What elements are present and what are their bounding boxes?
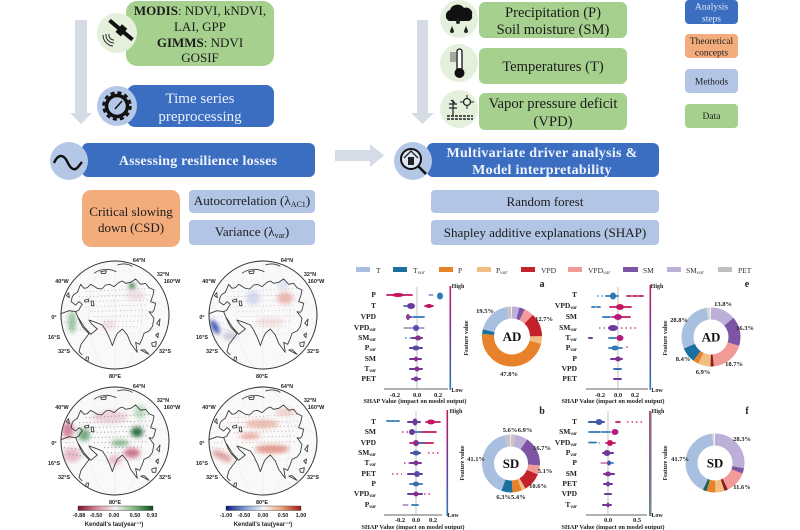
arrow: left to right — [335, 144, 384, 167]
data box: precipitation and soil moisture — [479, 2, 627, 38]
donut labels e: 8.4% — [676, 356, 690, 363]
donut labels b: b — [539, 406, 545, 417]
legend: SHAP feature colours: PET — [738, 266, 752, 275]
legend item: analysis steps — [685, 0, 738, 24]
legend: box categories — [685, 0, 738, 128]
icon: dry plant and sun — [440, 90, 478, 128]
step box: multivariate driver analysis — [427, 143, 659, 178]
icon: thermometer — [440, 44, 478, 82]
donut labels a: 19.5% — [476, 308, 494, 315]
feature labels b: SM — [358, 448, 369, 457]
ticks f: 0.5 — [633, 517, 642, 524]
donut labels b: 16.7% — [533, 445, 551, 452]
feature labels e: PET — [562, 374, 577, 383]
feature labels f: var — [570, 453, 577, 458]
data box: temperatures — [479, 48, 627, 84]
feature labels b: P — [371, 479, 376, 488]
feature labels a — [354, 290, 377, 383]
map graticule labels: 0° — [51, 441, 57, 447]
map graticule labels — [48, 384, 181, 506]
map graticule labels: 40°W — [55, 405, 70, 411]
ticks b — [361, 517, 465, 530]
map: bottom right globe — [196, 384, 325, 506]
feature labels a: P — [365, 343, 369, 352]
colorbar: blue-red Kendall tau — [220, 506, 306, 528]
arrow: down to driver analysis — [411, 20, 434, 124]
step box: time series preprocessing — [127, 85, 274, 127]
map graticule labels: 40°W — [55, 279, 70, 285]
ticks a — [363, 392, 467, 405]
feature labels a: VPD — [354, 323, 369, 332]
map: top left globe — [48, 258, 181, 380]
legend: SHAP feature colours: VPD — [588, 266, 603, 275]
feature labels b: T — [364, 458, 369, 467]
method box: autocorrelation: AC1 — [291, 200, 306, 209]
map graticule labels: 0° — [199, 315, 205, 321]
ticks b: 0.0 — [412, 517, 420, 524]
chart: SHAP beeswarm f — [555, 409, 669, 530]
ticks b: -0.2 — [395, 517, 405, 524]
data box: temperatures: Temperatures (T) — [502, 59, 604, 75]
map graticule labels: 160°W — [308, 405, 325, 411]
feature labels f: SM — [559, 427, 570, 436]
donut labels f: 28.3% — [733, 436, 751, 443]
feature labels a: P — [371, 290, 376, 299]
map graticule labels: 32°N — [157, 398, 169, 404]
feature value bar a: Low — [451, 388, 463, 394]
feature value bar e: High — [651, 284, 664, 290]
step box: assessing resilience losses — [82, 143, 315, 177]
method box: random forest — [431, 190, 659, 213]
feature labels f: PET — [562, 479, 577, 488]
chart: SHAP beeswarm b — [354, 409, 466, 530]
method box: variance: Variance (λ — [215, 224, 275, 239]
feature labels b: VPD — [361, 438, 377, 447]
legend: SHAP feature colours: P — [458, 266, 462, 275]
feature labels e: var — [570, 338, 577, 343]
data box: MODIS GIMMS GOSIF: GIMMS: NDVI — [157, 35, 243, 50]
method box: SHAP: Shapley additive explanations (SHAP) — [444, 225, 646, 240]
feature labels a: PET — [361, 374, 376, 383]
method box: SHAP — [431, 220, 659, 245]
feature labels f: var — [570, 505, 577, 510]
swarm points a — [387, 292, 443, 382]
feature labels e: T — [565, 333, 570, 342]
ticks a: 0.2 — [434, 392, 442, 399]
feature labels b: VPD — [354, 489, 369, 498]
swarm points f — [589, 419, 644, 508]
method box: autocorrelation: Autocorrelation (λ — [194, 193, 291, 208]
method box: variance — [189, 220, 315, 245]
feature value bar f — [649, 409, 669, 519]
feature labels e: VPD — [562, 364, 578, 373]
ticks b: 0.2 — [429, 517, 437, 524]
legend item: analysis steps: steps — [702, 14, 721, 24]
swarm points e — [589, 292, 643, 379]
concept box: critical slowing down: down (CSD) — [98, 220, 164, 235]
method box: autocorrelation: ) — [306, 193, 310, 208]
legend: SHAP feature colours — [356, 266, 752, 276]
data box: precipitation and soil moisture: Soil moisture (SM) — [497, 22, 609, 38]
feature value bar b — [446, 409, 466, 519]
feature value bar e: Feature value — [663, 320, 669, 356]
feature labels e: var — [570, 306, 577, 311]
ticks e: SHAP Value (impact on model output) — [561, 398, 665, 405]
colorbar: green-red Kendall tau: -0.88 — [73, 513, 85, 519]
chart: SHAP beeswarm e — [555, 284, 669, 405]
map graticule labels — [48, 258, 181, 380]
donut labels f — [671, 406, 751, 491]
feature labels e: SM — [566, 312, 577, 321]
ticks f: 0.0 — [604, 517, 612, 524]
donut labels f: 41.7% — [671, 456, 689, 463]
feature labels a: var — [369, 338, 376, 343]
map graticule labels: 16°S — [48, 335, 60, 341]
map graticule labels — [196, 258, 325, 380]
data box: vapor pressure deficit: Vapor pressure deficit — [489, 96, 617, 112]
data box: MODIS GIMMS GOSIF — [126, 1, 274, 66]
map graticule labels: 32°N — [304, 398, 316, 404]
feature value bar a: Feature value — [464, 320, 470, 356]
donut labels b: 5.1% — [538, 468, 552, 475]
feature labels a: var — [369, 328, 376, 333]
map graticule labels: 64°N — [281, 384, 293, 390]
colorbar: blue-red Kendall tau: Kendall's tau(year⁻¹) — [234, 521, 292, 528]
donut labels e — [670, 279, 754, 376]
ticks e: -0.2 — [595, 392, 605, 399]
feature labels b: SM — [365, 427, 376, 436]
colorbar: blue-red Kendall tau: 0.50 — [278, 513, 288, 519]
map graticule labels: 160°W — [164, 405, 181, 411]
map graticule labels: 64°N — [133, 258, 145, 264]
map: bottom left globe — [48, 384, 181, 506]
donut: f SD — [692, 440, 738, 486]
colorbar: blue-red Kendall tau: -1.00 — [220, 513, 232, 519]
ticks e: 0.2 — [631, 392, 639, 399]
colorbar: blue-red Kendall tau: -0.50 — [238, 513, 250, 519]
feature labels b: var — [369, 463, 376, 468]
concept box: critical slowing down — [82, 190, 180, 247]
feature value bar e — [650, 284, 669, 394]
donut labels e: 16.3% — [736, 325, 754, 332]
ticks f — [561, 517, 665, 530]
ticks e: 0.0 — [614, 392, 622, 399]
icon: wave — [50, 142, 88, 180]
colorbar: green-red Kendall tau: 0.93 — [147, 513, 157, 519]
donut labels a: AD — [503, 329, 521, 344]
donut labels e: 6.9% — [696, 369, 710, 376]
map graticule labels: 32°S — [58, 475, 70, 481]
panel: workflow left column — [50, 1, 315, 247]
method box: autocorrelation — [189, 190, 315, 213]
data box: MODIS GIMMS GOSIF: MODIS: NDVI, kNDVI, — [134, 3, 266, 18]
colorbar: green-red Kendall tau: -0.50 — [90, 513, 102, 519]
feature labels f: T — [572, 417, 577, 426]
ticks a: -0.2 — [390, 392, 400, 399]
map graticule labels: 16°S — [48, 461, 60, 467]
donut: a AD — [488, 312, 536, 360]
legend: SHAP feature colours: VPD — [541, 266, 557, 275]
feature labels f: VPD — [562, 489, 578, 498]
feature labels f: SM — [566, 469, 577, 478]
feature labels e: T — [572, 290, 577, 299]
legend: SHAP feature colours: SM — [643, 266, 654, 275]
donut: e AD — [688, 314, 734, 360]
feature labels e: P — [566, 343, 570, 352]
donut labels e: AD — [702, 330, 720, 344]
map graticule labels: 64°N — [281, 258, 293, 264]
map graticule labels: 32°S — [206, 475, 218, 481]
feature labels a: SM — [358, 333, 369, 342]
colorbar: green-red Kendall tau: 0.50 — [130, 513, 140, 519]
map graticule labels: 40°W — [202, 405, 217, 411]
feature labels b: P — [365, 500, 369, 509]
legend item: data: Data — [703, 112, 721, 122]
feature labels e — [555, 290, 578, 383]
feature labels e: SM — [559, 323, 570, 332]
icon: magnifier on house — [394, 142, 432, 180]
ticks e — [561, 392, 665, 405]
concept box: critical slowing down: Critical slowing — [89, 204, 173, 219]
donut labels f: 11.6% — [733, 484, 751, 491]
feature labels b — [354, 417, 377, 510]
map graticule labels: 32°S — [159, 349, 171, 355]
feature labels e: var — [570, 348, 577, 353]
feature labels a: T — [364, 364, 369, 373]
feature labels f: var — [570, 443, 577, 448]
donut labels b: 6.3%5.4% — [496, 494, 526, 501]
feature labels b: PET — [361, 469, 376, 478]
donut labels b: 5.6% — [503, 427, 517, 434]
map graticule labels: 32°N — [304, 272, 316, 278]
arrow: down to resilience — [70, 20, 92, 124]
legend: SHAP feature colours: T — [413, 266, 418, 275]
chart: SHAP beeswarm a — [354, 284, 470, 405]
legend: SHAP feature colours: var — [603, 270, 611, 276]
donut: b SD — [488, 440, 534, 486]
feature labels a: var — [369, 369, 376, 374]
donut labels e: e — [745, 279, 750, 290]
feature labels a: T — [371, 301, 376, 310]
feature value bar a — [450, 284, 470, 394]
icon: gear gauge — [97, 86, 137, 126]
feature labels a: SM — [365, 354, 376, 363]
feature labels f: var — [570, 432, 577, 437]
feature labels e: var — [570, 328, 577, 333]
colorbar: blue-red Kendall tau: 0.00 — [258, 513, 268, 519]
data box: precipitation and soil moisture: Precipitation (P) — [505, 5, 601, 21]
map graticule labels: 160°W — [164, 279, 181, 285]
feature labels b: var — [369, 453, 376, 458]
step box: time series preprocessing: Time series — [165, 91, 235, 107]
feature labels b: var — [369, 505, 376, 510]
legend item: theoretical concepts: concepts — [695, 48, 728, 58]
feature labels f: P — [572, 458, 577, 467]
donut labels b: 6.9% — [518, 427, 532, 434]
map graticule labels: 16°S — [196, 335, 208, 341]
feature labels e: P — [572, 354, 577, 363]
legend: SHAP feature colours: P — [496, 266, 500, 275]
data box: MODIS GIMMS GOSIF: LAI, GPP — [174, 19, 226, 34]
map graticule labels — [196, 384, 325, 506]
colorbar: green-red Kendall tau: 0.00 — [109, 513, 119, 519]
donut labels a: 12.7% — [535, 316, 553, 323]
map graticule labels: 32°S — [58, 349, 70, 355]
feature labels f: T — [565, 500, 570, 509]
map graticule labels: 0° — [199, 441, 205, 447]
colorbar: green-red Kendall tau: Kendall's tau(year⁻¹) — [85, 521, 143, 528]
legend: SHAP feature colours: var — [418, 270, 426, 276]
legend: SHAP feature colours: var — [697, 270, 705, 276]
icon: rain cloud — [440, 0, 478, 38]
legend: SHAP feature colours: T — [376, 266, 381, 275]
feature value bar a: High — [452, 284, 465, 290]
donut labels e: 13.8% — [714, 301, 732, 308]
ticks a: SHAP Value (impact on model output) — [363, 398, 467, 405]
donut labels a: 47.8% — [500, 371, 518, 378]
map graticule labels: 32°S — [159, 475, 171, 481]
method box: variance: var — [275, 231, 285, 240]
map graticule labels: 32°N — [157, 272, 169, 278]
feature value bar f: High — [652, 409, 665, 415]
feature labels b: var — [369, 494, 376, 499]
method box: random forest: Random forest — [507, 194, 584, 209]
feature labels a: VPD — [361, 312, 377, 321]
map graticule labels: 80°E — [109, 500, 121, 506]
feature labels f — [555, 417, 578, 510]
map graticule labels: 80°E — [256, 500, 268, 506]
map graticule labels: 80°E — [256, 374, 268, 380]
data box: vapor pressure deficit — [479, 93, 627, 130]
map graticule labels: 40°W — [202, 279, 217, 285]
map graticule labels: 32°S — [307, 349, 319, 355]
feature value bar b: High — [450, 409, 463, 415]
data box: MODIS GIMMS GOSIF: GOSIF — [181, 50, 219, 65]
step box: multivariate driver analysis: Model interpretability — [472, 163, 612, 178]
feature value bar e: Low — [651, 388, 663, 394]
donut labels b — [467, 406, 552, 501]
feature value bar f: Feature value — [663, 445, 669, 481]
legend: SHAP feature colours: SM — [686, 266, 697, 275]
donut labels b: SD — [503, 456, 519, 471]
swarm points b — [387, 418, 440, 505]
step box: multivariate driver analysis: Multivariate driver analysis & — [446, 146, 638, 161]
map graticule labels: 0° — [51, 315, 57, 321]
method box: variance: ) — [285, 224, 289, 239]
map graticule labels: 64°N — [133, 384, 145, 390]
donut labels b: 10.6% — [529, 483, 547, 490]
donut labels a — [476, 279, 553, 378]
donut labels f: SD — [707, 456, 723, 470]
map: top right globe — [196, 258, 325, 380]
donut labels f: f — [745, 406, 749, 417]
step box: assessing resilience losses: Assessing resilience losses — [119, 154, 278, 169]
feature labels f: P — [566, 448, 570, 457]
map graticule labels: 32°S — [307, 475, 319, 481]
colorbar: blue-red Kendall tau: 1.00 — [296, 513, 306, 519]
feature value bar f: Low — [651, 513, 663, 519]
map graticule labels: 16°S — [196, 461, 208, 467]
map graticule labels: 160°W — [308, 279, 325, 285]
legend item: analysis steps: Analysis — [695, 2, 728, 12]
data box: vapor pressure deficit: (VPD) — [533, 114, 573, 130]
donut labels e: 28.8% — [670, 317, 688, 324]
step box: time series preprocessing: preprocessing — [158, 109, 242, 125]
feature labels e: VPD — [555, 301, 570, 310]
donut labels e: 18.7% — [725, 361, 743, 368]
icon: satellite — [97, 13, 137, 53]
legend item: theoretical concepts — [685, 34, 738, 58]
donut labels b: 41.1% — [467, 456, 485, 463]
ticks a: 0.0 — [413, 392, 421, 399]
map graticule labels: 80°E — [109, 374, 121, 380]
donut labels a: a — [540, 279, 544, 290]
legend: SHAP feature colours: var — [500, 270, 508, 276]
map graticule labels: 32°S — [206, 349, 218, 355]
colorbar: green-red Kendall tau — [73, 506, 157, 528]
feature value bar b: Feature value — [460, 445, 466, 481]
feature labels a: var — [369, 348, 376, 353]
feature labels f: VPD — [555, 438, 570, 447]
legend item: theoretical concepts: Theoretical — [690, 37, 733, 47]
panel: workflow right column — [394, 0, 659, 245]
feature value bar b: Low — [447, 513, 459, 519]
legend item: methods: Methods — [695, 78, 728, 88]
feature labels b: T — [371, 417, 376, 426]
